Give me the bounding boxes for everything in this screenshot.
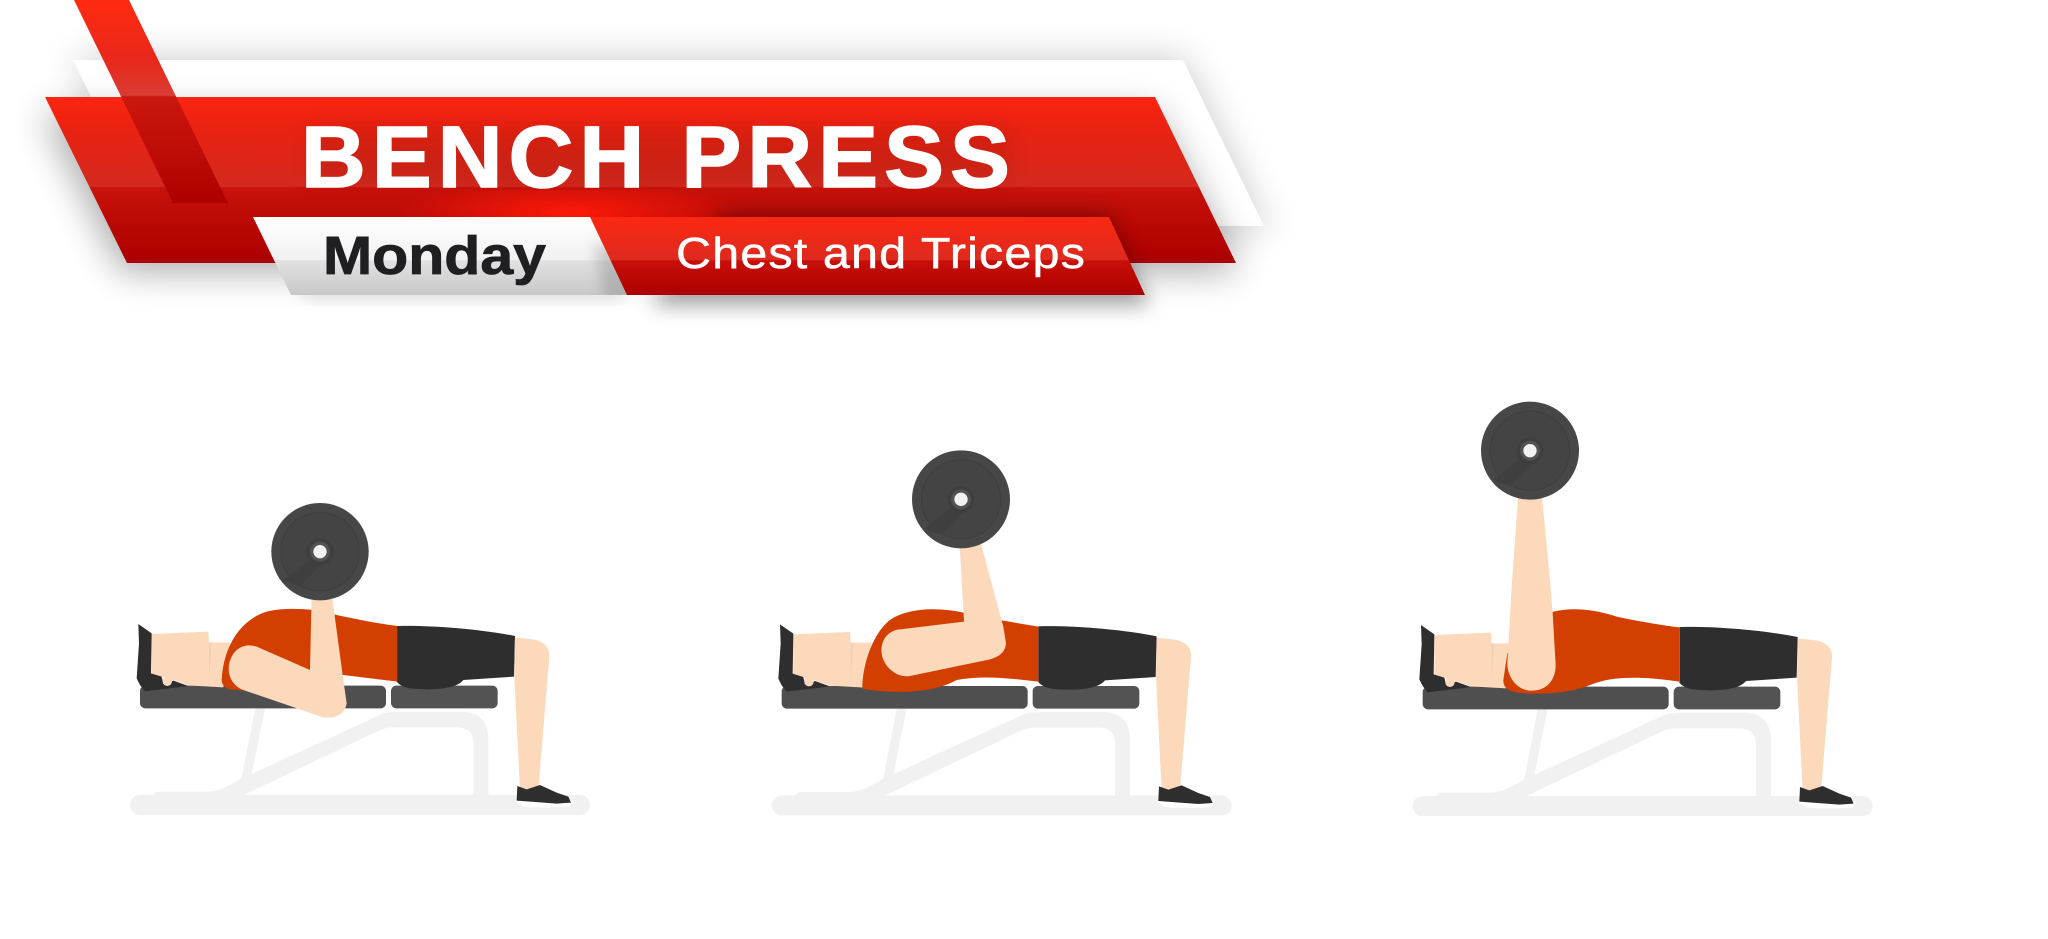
day tab right shade [591,240,627,295]
leg [1797,638,1832,791]
muscle tab shadow [650,214,1150,306]
title shadow [310,125,1010,183]
barbell plate [912,450,1010,548]
muscle group tab [590,217,1145,295]
neck shadow [209,643,211,682]
shoe sole gap [1157,801,1215,808]
shirt [222,609,397,693]
white back panel [73,60,1264,226]
main red ribbon [45,97,1236,263]
day tab [253,217,640,300]
ear [163,677,172,686]
shoe [517,785,571,804]
back panel shadow [73,58,1268,232]
title banner [42,0,1268,306]
bench pads [1423,687,1780,709]
bent arm [229,593,347,718]
ear [804,677,814,686]
hair [1419,625,1471,692]
neck shadow [1492,644,1494,683]
figure 1: bar at chest [130,503,590,815]
bench pads [140,686,498,708]
hair [137,624,188,691]
day tab shadow [300,290,625,300]
leg [514,637,549,790]
upper body [1481,402,1679,694]
figure 2: bar halfway [772,450,1232,815]
day label: Monday [323,226,546,286]
barbell plate [271,503,369,600]
bent arm [881,540,1006,676]
bench frame [1413,709,1873,816]
diagonal red stripe [74,0,228,203]
bench pads [782,686,1139,709]
shorts [397,626,515,689]
shorts [1038,626,1157,690]
shoe sole gap [1798,802,1856,808]
head and neck [152,632,230,687]
shoe sole gap [515,801,573,807]
upper body [862,450,1038,692]
figure 3: arm extended [1413,402,1873,816]
shoe [1799,786,1854,805]
head and neck [1434,633,1513,688]
shirt [862,609,1038,692]
bench frame [130,708,590,815]
hair [778,624,830,692]
straight arm [1507,493,1556,691]
glow above tabs [400,190,740,218]
barbell plate [1481,402,1579,500]
shorts [1679,627,1798,690]
title text: BENCH PRESS [301,109,1016,206]
shirt [1503,609,1679,694]
bench frame [772,709,1232,815]
head and neck [793,632,872,688]
main ribbon shadow [42,112,1240,272]
leg [1156,638,1191,790]
ear [1445,678,1455,687]
shoe [1158,785,1213,804]
muscle group label: Chest and Triceps [676,229,1086,278]
neck shadow [851,643,853,682]
